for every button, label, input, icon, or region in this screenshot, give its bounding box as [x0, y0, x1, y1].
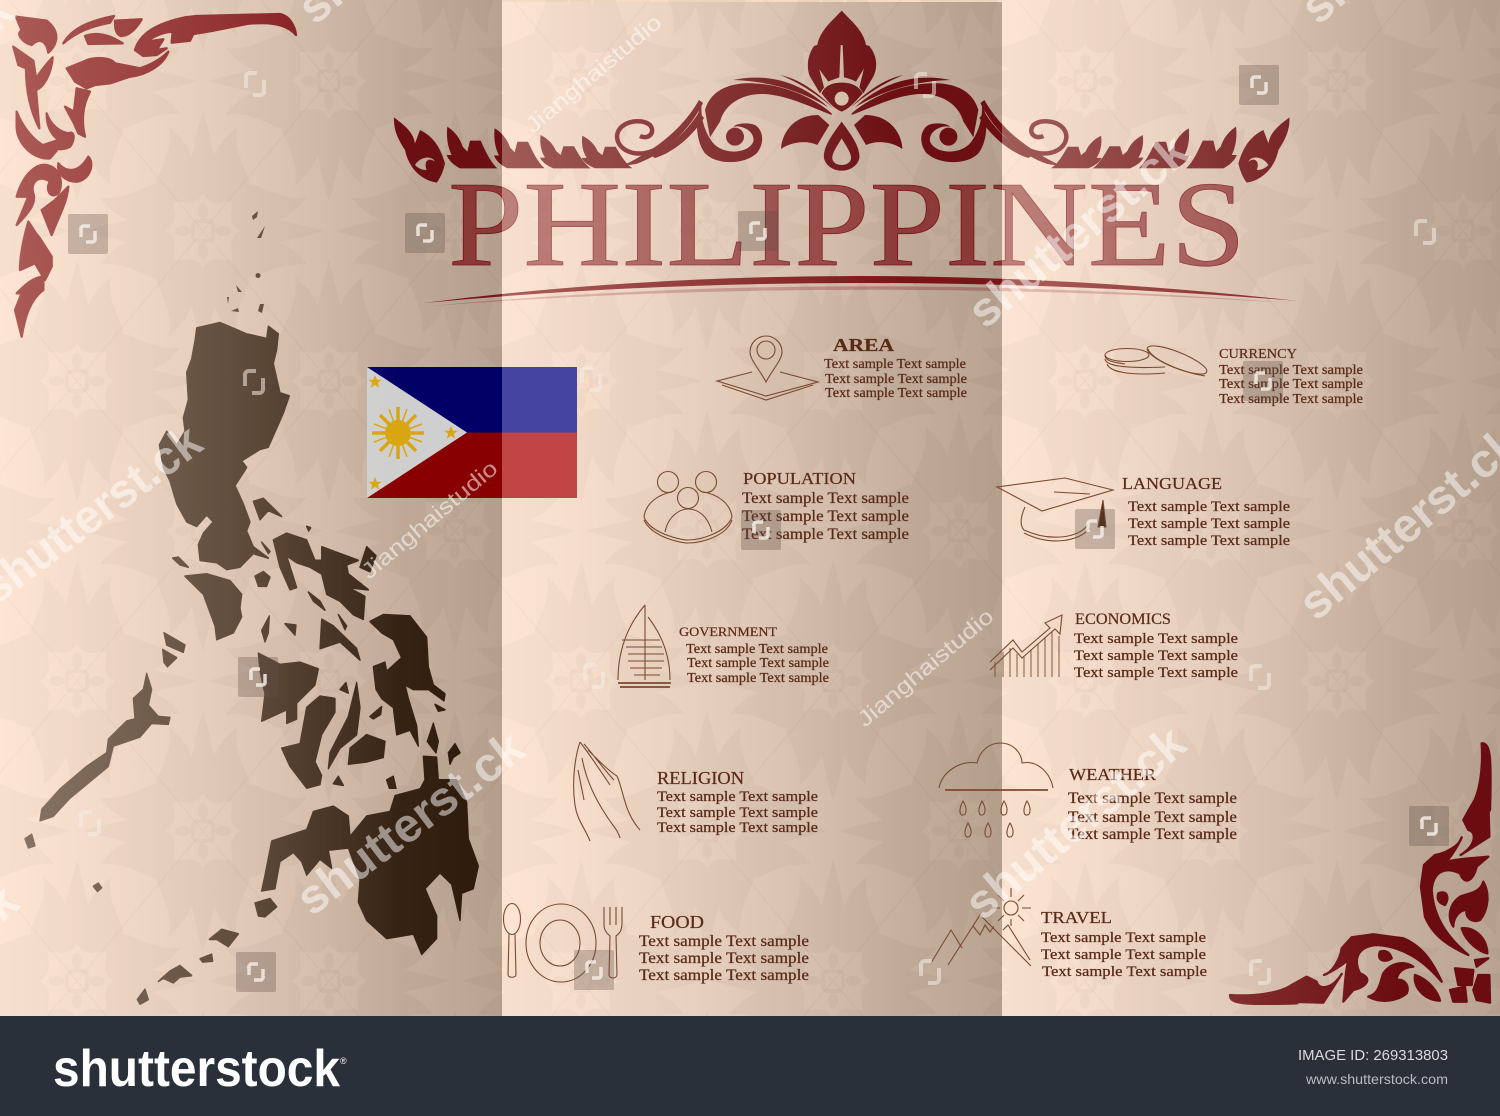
icon: praying hands [574, 742, 640, 841]
info block: area [717, 335, 967, 401]
island: Palawan [40, 674, 170, 821]
info block: food [504, 904, 809, 984]
text: population body [742, 490, 909, 543]
text: government body: Text sample Text sample [687, 671, 829, 686]
panel: left fold [0, 0, 502, 1016]
fold shading: centre [502, 2, 1002, 1016]
island: Masbate [320, 619, 360, 660]
map of the Philippines [25, 211, 478, 1004]
text: travel body: Text sample Text sample [1041, 947, 1206, 963]
text: currency body: Text sample Text sample [1219, 392, 1363, 407]
icon: growth chart [990, 615, 1062, 677]
info block: travel [931, 888, 1207, 980]
watermarks: shutterst.ck [958, 124, 1199, 338]
island: Mindanao [262, 756, 478, 954]
watermark stamps [68, 65, 1449, 992]
island: Bicol islands [273, 533, 368, 619]
image id: IMAGE ID: 269313803 [1298, 1048, 1448, 1064]
text: religion body: Text sample Text sample [657, 805, 818, 821]
heading: language: LANGUAGE [1122, 474, 1222, 493]
text: population body: Text sample Text sample [742, 508, 909, 525]
text: economics body: Text sample Text sample [1074, 648, 1238, 664]
watermarks: shutterst.ck [287, 721, 534, 926]
heading: area: AREA [833, 335, 894, 355]
island: Samar and Leyte [370, 615, 445, 746]
island: Mindoro [185, 574, 242, 640]
text: area body [824, 357, 967, 401]
text: language body: Text sample Text sample [1128, 533, 1290, 549]
text: language body: Text sample Text sample [1128, 516, 1290, 532]
title: PHILIPPINES [448, 157, 1246, 292]
info block: economics [990, 611, 1238, 681]
text: religion body: Text sample Text sample [657, 789, 818, 805]
flag: lighter section on centre panel [502, 367, 577, 498]
panel: right fold [1002, 0, 1500, 1016]
heading: religion: RELIGION [657, 768, 744, 788]
heading: weather: WEATHER [1069, 765, 1157, 784]
text: currency body: Text sample Text sample [1219, 363, 1363, 378]
text: weather body: Text sample Text sample [1068, 790, 1237, 807]
text: language body [1128, 499, 1290, 549]
heading: travel: TRAVEL [1041, 908, 1112, 927]
flag: section on left panel [367, 367, 502, 498]
text: weather body: Text sample Text sample [1068, 826, 1237, 843]
text: currency body: Text sample Text sample [1219, 377, 1363, 392]
title underline swoosh [424, 276, 1298, 306]
heading: currency: CURRENCY [1219, 347, 1297, 362]
text: travel body: Text sample Text sample [1041, 930, 1206, 946]
info block: language [997, 474, 1290, 549]
text: food body: Text sample Text sample [639, 933, 809, 950]
watermarks: Jianghaistudio [356, 455, 502, 584]
info block: weather [939, 743, 1237, 843]
fold shading: right [1002, 0, 1500, 1016]
watermarks: Jianghaistudio [520, 9, 666, 138]
website: www.shutterstock.com [1305, 1071, 1448, 1087]
watermarks: Jianghaistudio [852, 603, 998, 732]
text: weather body [1068, 790, 1237, 843]
text: currency body [1219, 363, 1363, 407]
text: religion body [657, 789, 818, 836]
info block: government [618, 605, 829, 687]
text: government body [686, 642, 829, 686]
text: population body: Text sample Text sample [742, 490, 909, 507]
icon: people [644, 472, 732, 543]
info block: population [644, 469, 909, 543]
icon: sail tower [618, 605, 671, 687]
info block: religion [574, 742, 818, 841]
text: language body: Text sample Text sample [1128, 499, 1290, 515]
text: area body: Text sample Text sample [825, 386, 967, 401]
text: weather body: Text sample Text sample [1068, 809, 1237, 826]
icon: graduation cap [997, 478, 1113, 541]
island: Panay [258, 653, 318, 723]
icon: coins [1105, 341, 1210, 379]
fold shading: left [0, 0, 502, 1016]
footer bar [0, 1016, 1500, 1116]
heading: economics: ECONOMICS [1075, 611, 1171, 628]
icon: mountains and sun [931, 888, 1031, 966]
panel: centre fold [502, 2, 1002, 1016]
icon: rain cloud [939, 743, 1053, 837]
text: area body: Text sample Text sample [825, 372, 967, 387]
text: religion body: Text sample Text sample [657, 820, 818, 836]
northern islets [227, 211, 265, 313]
heading: food: FOOD [650, 912, 704, 932]
text: government body: Text sample Text sample [686, 642, 828, 657]
island: Bohol [348, 735, 385, 764]
island: Negros [282, 696, 335, 788]
text: government body: Text sample Text sample [687, 656, 829, 671]
footer logo: shutterstock [53, 1040, 340, 1098]
small islands [25, 498, 460, 1004]
text: food body [639, 933, 809, 984]
text: economics body: Text sample Text sample [1074, 665, 1238, 681]
text: area body: Text sample Text sample [824, 357, 966, 372]
info block: currency [1105, 341, 1363, 407]
registered mark: ® [340, 1056, 347, 1066]
text: food body: Text sample Text sample [639, 967, 809, 984]
corner ornament: bottom right [1230, 743, 1491, 1004]
watermarks: shutterst.ck [955, 716, 1196, 930]
island: Luzon [159, 323, 289, 569]
heading: government: GOVERNMENT [679, 624, 777, 639]
ornament: crown above the title [394, 11, 1289, 183]
corner ornament: top left [13, 14, 296, 337]
text: economics body [1074, 631, 1238, 681]
text: travel body [1041, 930, 1207, 980]
island: Cebu [328, 683, 360, 769]
icon: map pin [717, 336, 818, 400]
text: economics body: Text sample Text sample [1074, 631, 1238, 647]
text: population body: Text sample Text sample [742, 526, 909, 543]
icon: plate and cutlery [504, 904, 622, 982]
text: travel body: Text sample Text sample [1042, 964, 1207, 980]
heading: population: POPULATION [743, 469, 856, 488]
text: food body: Text sample Text sample [639, 950, 809, 967]
